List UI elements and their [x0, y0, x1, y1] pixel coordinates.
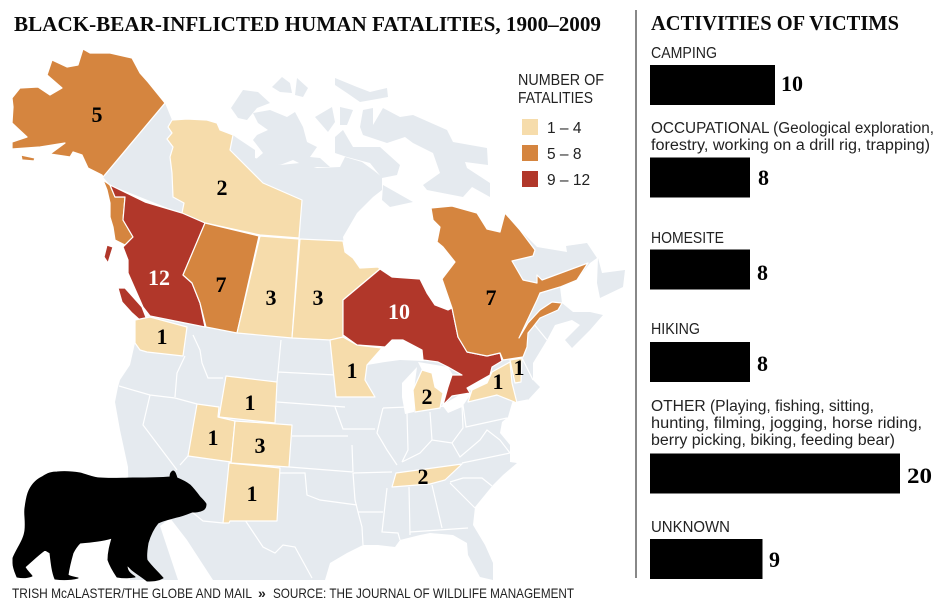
map numbers: 1: [156, 324, 168, 349]
map numbers: 1: [346, 358, 358, 383]
bar group: occupational: 8: [758, 165, 769, 190]
map numbers: 1: [246, 481, 258, 506]
bar group: hiking: 8: [757, 351, 768, 376]
legend label 1-4: 1 – 4: [547, 120, 582, 137]
bar group: homesite: 8: [757, 260, 768, 285]
bar group: hiking: HIKING: [651, 321, 700, 338]
vertical divider: [635, 10, 637, 578]
region: Alberta, 7: [183, 223, 259, 333]
legend swatch 9-12: [522, 171, 538, 187]
region: New Mexico, 1: [223, 463, 280, 523]
region: Ontario, 10: [343, 269, 502, 405]
credit line: [12, 585, 574, 601]
bar group: other: hunting, filming, jogging, horse riding,: [651, 415, 922, 432]
map numbers: 2: [422, 384, 432, 409]
region: Manitoba, 3: [292, 239, 380, 340]
bar group: hiking: [650, 321, 768, 382]
map numbers: 1: [244, 390, 256, 415]
bar group: camping: [650, 45, 803, 105]
credit line: SOURCE: THE JOURNAL OF WILDLIFE MANAGEMENT: [273, 585, 574, 601]
bar group: occupational: [650, 120, 934, 198]
region: British Columbia, 12: [104, 185, 205, 327]
region: Colorado, 3: [231, 421, 292, 467]
bar group: homesite: [650, 230, 768, 290]
legend swatch 1-4: [522, 119, 538, 135]
map numbers: [92, 102, 524, 506]
map numbers: 2: [418, 464, 428, 489]
region: Northwest Territories, 2: [167, 119, 302, 238]
bar group: occupational: forestry, working on a drill rig, trapping): [651, 137, 930, 154]
bar group: other: berry picking, biking, feeding bear): [651, 432, 895, 449]
region: Alaska, 5: [12, 49, 165, 245]
map numbers: 3: [266, 285, 276, 310]
region: Tennessee, 2: [392, 464, 462, 487]
region: Vermont, 1: [510, 358, 522, 383]
region: Minnesota, 1: [330, 337, 382, 397]
legend: [518, 72, 604, 189]
map numbers: 12: [148, 265, 170, 290]
map of North America: [12, 49, 625, 580]
heading: activities of victims: ACTIVITIES OF VICTIMS: [651, 11, 899, 35]
map numbers: 7: [216, 272, 226, 297]
credit line: TRISH McALASTER/THE GLOBE AND MAIL: [12, 585, 252, 601]
region: New York, 1: [468, 362, 517, 403]
bar group: camping: CAMPING: [651, 45, 717, 62]
title: BLACK-BEAR-INFLICTED HUMAN FATALITIES, 1900–2009: [14, 12, 601, 36]
bar group: unknown: 9: [769, 547, 780, 572]
bar chart: activities: [650, 45, 934, 579]
region: Saskatchewan, 3: [237, 236, 299, 338]
bar group: unknown: UNKNOWN: [651, 519, 730, 536]
legend heading: NUMBER OF: [518, 72, 604, 89]
legend heading: [518, 72, 604, 107]
bar group: other: [650, 398, 932, 494]
legend label 9-12: 9 – 12: [547, 172, 590, 189]
map numbers: 2: [216, 175, 228, 200]
map numbers: 3: [254, 433, 266, 458]
bar group: other: 20: [907, 463, 932, 488]
bar group: camping: 10: [781, 71, 803, 96]
bar group: unknown: [650, 519, 780, 579]
legend label 5-8: 5 – 8: [547, 146, 581, 163]
bar group: homesite: HOMESITE: [651, 230, 724, 247]
map numbers: 1: [208, 425, 218, 450]
map numbers: 1: [514, 355, 524, 380]
region: Wyoming, 1: [219, 376, 277, 423]
map numbers: 10: [388, 299, 410, 324]
legend heading: FATALITIES: [518, 90, 593, 107]
region: Washington, 1: [135, 317, 187, 356]
region: Quebec, 7: [431, 206, 588, 360]
region: Michigan, 2: [413, 370, 443, 412]
region: Utah, 1: [188, 404, 235, 462]
map numbers: 1: [492, 369, 504, 394]
bar group: occupational: OCCUPATIONAL (Geological exploration,: [651, 120, 934, 137]
icon: black bear silhouette: [13, 471, 206, 581]
bar group: other: OTHER (Playing, fishing, sitting,: [651, 398, 874, 415]
legend swatch 5-8: [522, 145, 538, 161]
Great Lakes: [367, 340, 494, 414]
state and province borders: [103, 103, 547, 578]
map numbers: 3: [312, 285, 324, 310]
map numbers: 7: [486, 285, 496, 310]
map numbers: 5: [92, 102, 102, 127]
base land: Canada and United States: [103, 77, 625, 580]
credit line: »: [258, 585, 266, 601]
